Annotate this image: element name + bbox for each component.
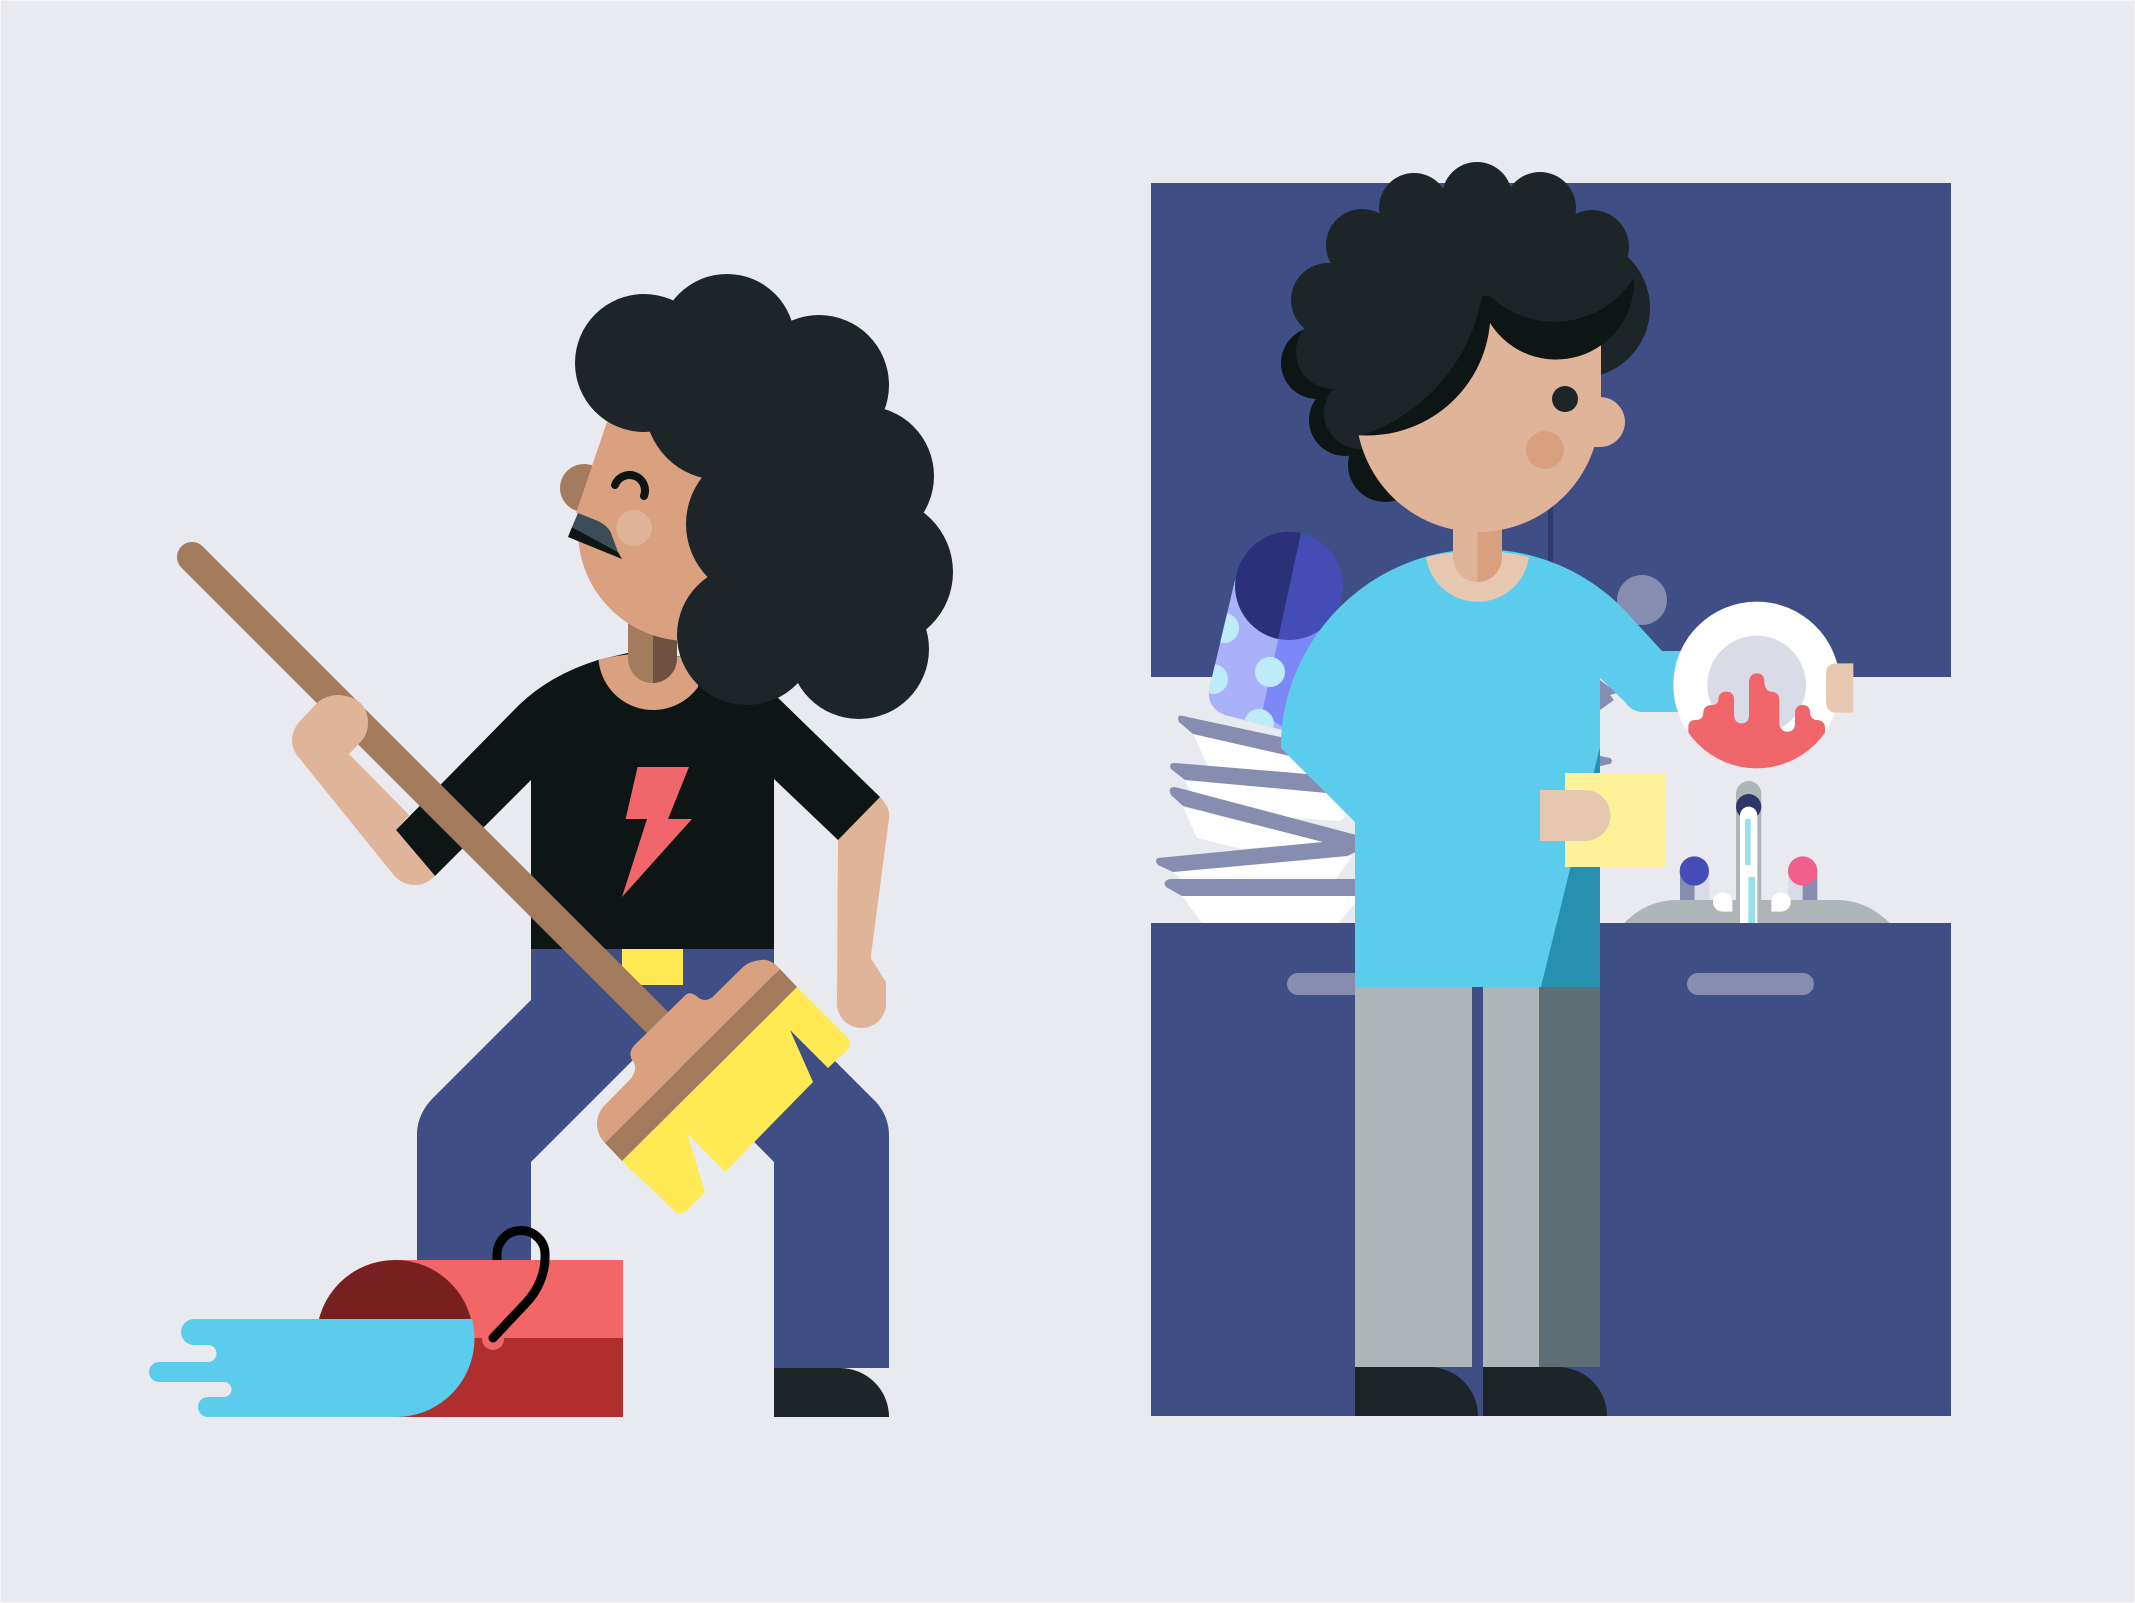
- left arm and hand: [292, 695, 435, 885]
- left tap: [1680, 856, 1709, 901]
- basin: [1624, 900, 1890, 923]
- shoe: [774, 1368, 889, 1417]
- shirt: [1281, 549, 1700, 987]
- plates: [1156, 680, 1617, 923]
- right tap: [1788, 856, 1817, 901]
- upper cabinet: [1151, 183, 1951, 677]
- nose: [560, 464, 608, 512]
- moustache: [568, 513, 622, 559]
- left handle: [1287, 973, 1377, 995]
- bucket handle back: [497, 1230, 521, 1262]
- head: [568, 420, 798, 641]
- cheek: [1526, 431, 1564, 469]
- belt buckle: [622, 949, 683, 985]
- bucket handle: [493, 1230, 545, 1338]
- stack of dishes: [1156, 532, 1617, 923]
- bristles: [622, 987, 850, 1213]
- character: man sweeping: [192, 274, 953, 1417]
- hand holding sponge: [1540, 790, 1610, 841]
- collar: [1426, 551, 1529, 602]
- dirty plate: [1673, 602, 1853, 780]
- broom head: [597, 960, 780, 1143]
- trousers: [417, 945, 889, 1368]
- broom: [597, 960, 850, 1213]
- cheek: [616, 510, 652, 546]
- soap bubble: [1617, 575, 1667, 625]
- food stain: [1688, 673, 1825, 768]
- kitchen cabinets: [1151, 183, 1951, 677]
- fingers on plate: [1826, 663, 1853, 713]
- ear: [1590, 397, 1625, 447]
- bucket mouth: [316, 1260, 474, 1417]
- neck: [1453, 527, 1502, 582]
- broom handle: [192, 557, 670, 1035]
- shoes: [1355, 1367, 1607, 1416]
- tap bases: [1713, 892, 1791, 912]
- fringe shadow: [1357, 278, 1634, 435]
- spilled water: [149, 1319, 474, 1417]
- sink with faucet: [1624, 781, 1890, 923]
- right arm: [837, 797, 889, 1028]
- handle pivot: [482, 1328, 504, 1350]
- polka dot cup: [1208, 532, 1343, 730]
- broom band: [605, 969, 797, 1161]
- cabinet door seam: [1548, 490, 1553, 580]
- character: man washing dishes: [1281, 162, 1700, 1416]
- trousers: [1355, 985, 1600, 1367]
- curly hair: [575, 274, 953, 719]
- sponge: [1565, 773, 1665, 867]
- collar: [598, 653, 700, 710]
- lower cabinet: [1151, 923, 1951, 1416]
- faucet: [1736, 781, 1761, 923]
- t-shirt: [396, 650, 880, 949]
- curly hair: [1291, 162, 1634, 436]
- back hair: [1281, 238, 1650, 502]
- bucket body top: [395, 1260, 623, 1338]
- right handle: [1687, 973, 1814, 995]
- face: [1358, 323, 1625, 532]
- overturned bucket with water: [149, 1230, 623, 1417]
- bucket body bottom: [395, 1338, 623, 1417]
- eye: [1552, 386, 1578, 412]
- lightning bolt: [622, 767, 692, 897]
- neck: [628, 615, 677, 683]
- eye: [615, 475, 645, 496]
